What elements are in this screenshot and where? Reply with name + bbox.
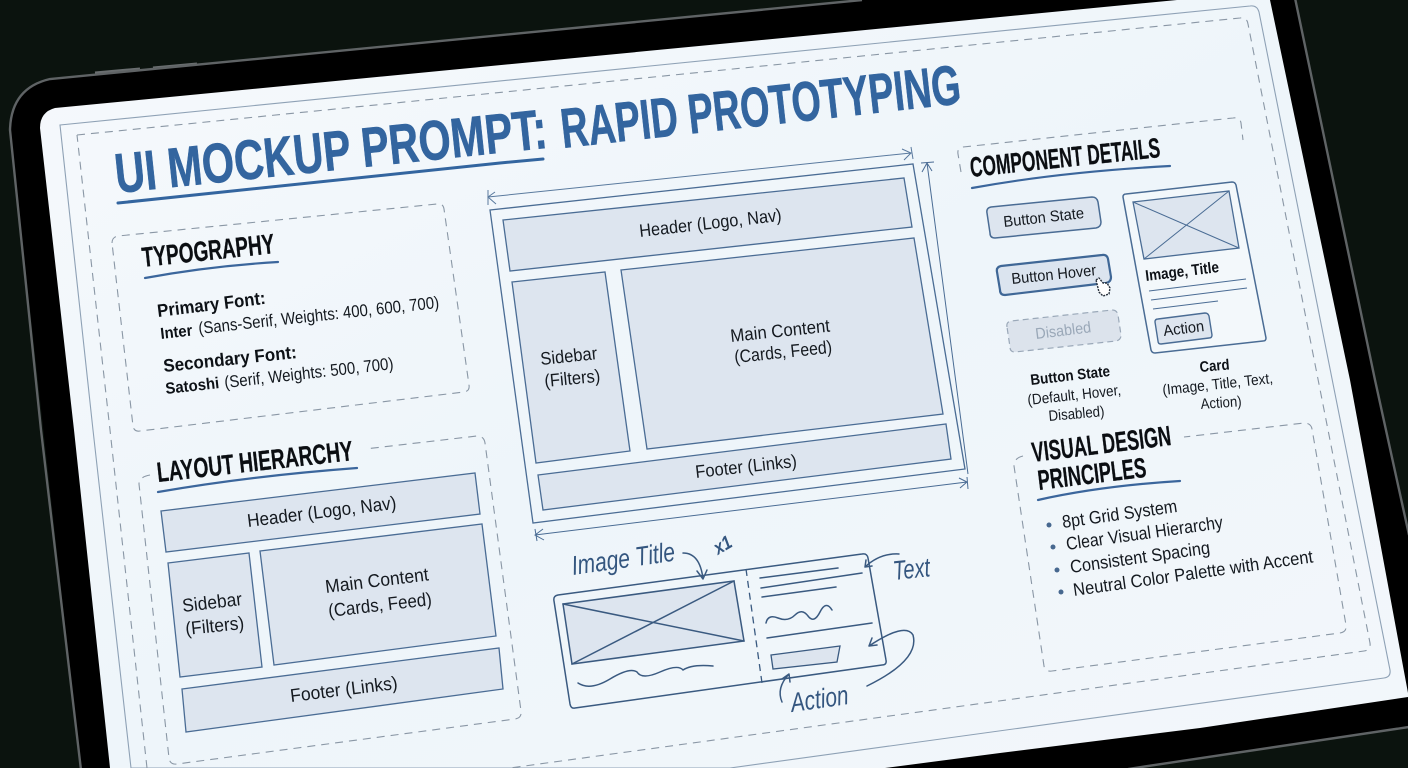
- list: principles: [1046, 496, 1314, 600]
- box: sidebar: [512, 272, 630, 463]
- caption: button state: Disabled): [1048, 403, 1105, 425]
- caption: card: [1162, 356, 1274, 413]
- annotation: text: Text: [891, 552, 933, 586]
- heading: visual design principles: [1030, 420, 1180, 500]
- box: sidebar: Sidebar: [181, 588, 243, 616]
- sketch: annotated card: [554, 532, 933, 718]
- list: principles: Neutral Color Palette with Accent: [1072, 546, 1314, 600]
- icon: hand cursor: [1096, 278, 1110, 296]
- panel: component details: [958, 118, 1274, 425]
- button: default: [987, 197, 1101, 238]
- dimension arrow: right: [921, 162, 968, 474]
- annotation: text: [865, 552, 933, 586]
- card component: [1123, 182, 1266, 353]
- card title: Image, Title: [1144, 259, 1220, 285]
- heading: visual design principles: VISUAL DESIGN: [1030, 420, 1173, 468]
- caption: card: Action): [1200, 393, 1242, 413]
- box: header: [161, 473, 480, 552]
- panel: layout hierarchy: [139, 435, 521, 764]
- box: header: Header (Logo, Nav): [638, 205, 783, 241]
- text: secondary font: [162, 342, 394, 398]
- tablet side buttons: [95, 64, 197, 73]
- caption: button state: (Default, Hover,: [1027, 382, 1122, 409]
- button: default: Button State: [1003, 205, 1085, 231]
- heading: visual design principles: PRINCIPLES: [1036, 452, 1148, 496]
- box: main content: [621, 238, 943, 449]
- text: secondary font: Satoshi: [165, 375, 220, 398]
- title: [112, 53, 964, 205]
- button: hover: [997, 255, 1111, 296]
- sketch text lines: [760, 568, 872, 638]
- caption: card: Card: [1199, 356, 1230, 376]
- text: secondary font: (Serif, Weights: 500, 700): [223, 354, 394, 392]
- card action button: [1155, 313, 1212, 344]
- annotation: image title: Image Title: [570, 537, 677, 581]
- sketch image placeholder: [563, 581, 744, 664]
- text: primary font: Inter: [160, 323, 193, 343]
- button: disabled: [1007, 310, 1121, 352]
- button: disabled: Disabled: [1034, 319, 1092, 343]
- box: main content: Main Content: [324, 563, 430, 597]
- button: hover: Button Hover: [1011, 262, 1097, 288]
- panel: visual design principles: [1014, 420, 1346, 671]
- box: main content: Main Content: [729, 316, 831, 346]
- caption: button state: Button State: [1030, 363, 1111, 389]
- wireframe: main layout: [488, 147, 968, 541]
- heading: typography: TYPOGRAPHY: [140, 228, 276, 273]
- box: footer: [538, 424, 951, 510]
- sketch action rectangle: [771, 646, 840, 669]
- text: secondary font: Secondary Font:: [162, 342, 298, 376]
- box: footer: Footer (Links): [289, 672, 399, 706]
- box: sidebar: (Filters): [543, 366, 601, 391]
- title: UI MOCKUP PROMPT:: [112, 97, 550, 205]
- box: sidebar: [168, 553, 262, 677]
- wireframe frame: [490, 164, 965, 523]
- heading: layout hierarchy: LAYOUT HIERARCHY: [155, 435, 355, 488]
- list: principles: Clear Visual Hierarchy: [1065, 512, 1224, 554]
- list: principles: Consistent Spacing: [1069, 538, 1211, 577]
- sketch card outline: [554, 554, 886, 708]
- annotation: action: Action: [787, 680, 850, 718]
- box: sidebar: Sidebar: [539, 343, 598, 369]
- box: header: Header (Logo, Nav): [246, 492, 397, 531]
- text: primary font: (Sans-Serif, Weights: 400, 600, 700): [197, 293, 440, 338]
- list: principles: 8pt Grid System: [1061, 496, 1178, 532]
- card image placeholder: [1133, 191, 1239, 259]
- box: main content: (Cards, Feed): [733, 337, 833, 367]
- title: RAPID PROTOTYPING: [557, 53, 964, 160]
- box: main content: (Cards, Feed): [327, 588, 433, 621]
- dimension arrow: bottom: [535, 477, 968, 541]
- box: sidebar: (Filters): [184, 612, 245, 639]
- annotation: action: [780, 630, 914, 718]
- caption: card: (Image, Title, Text,: [1162, 370, 1274, 399]
- panel: typography: [112, 204, 469, 431]
- box: header: [503, 178, 912, 271]
- box: footer: Footer (Links): [694, 451, 798, 482]
- sketch divider: [746, 569, 762, 683]
- heading: component details: COMPONENT DETAILS: [968, 132, 1162, 183]
- dimension arrow: top: [488, 147, 913, 205]
- box: main content: [260, 524, 496, 665]
- sketch squiggles: [578, 605, 832, 686]
- text: primary font: Primary Font:: [156, 288, 267, 321]
- text: primary font: [156, 288, 440, 343]
- box: footer: [182, 648, 503, 732]
- annotation: scribble: x1: [709, 532, 736, 560]
- caption: button state: [1027, 363, 1122, 425]
- card text lines: [1149, 279, 1247, 309]
- card action button: Action: [1162, 318, 1205, 340]
